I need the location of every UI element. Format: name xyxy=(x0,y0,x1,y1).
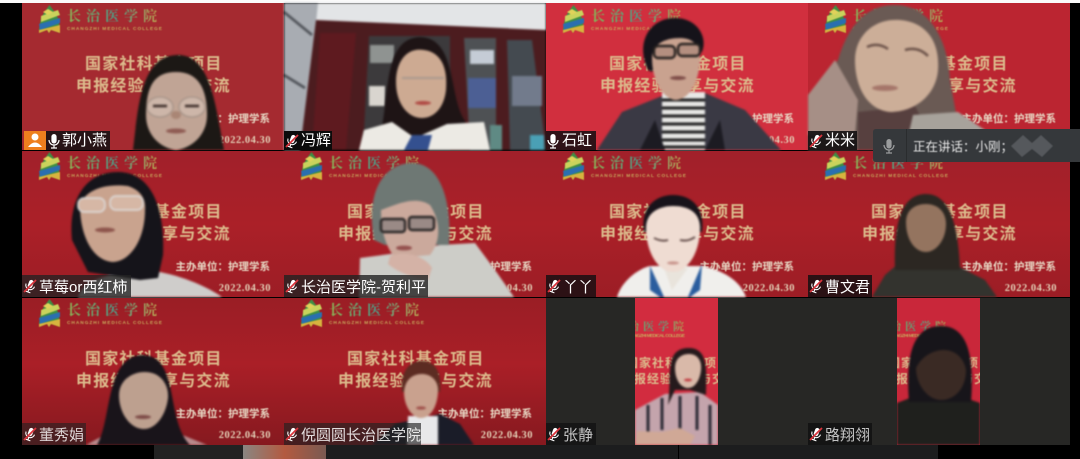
slide: logo and title: 申报经验分享与交流 xyxy=(338,371,493,390)
slide: logo and title: 长治医学院 xyxy=(853,6,948,26)
portrait video: 申报经验分享与交流 xyxy=(883,371,1000,386)
slide: logo and title: 主办单位：护理学系 xyxy=(962,112,1056,125)
slide: logo and title: 国家社科基金项目 xyxy=(609,202,747,221)
video tile: 路翔翎 xyxy=(808,298,1070,445)
slide: logo and title: CHANGZHI MEDICAL COLLEGE xyxy=(591,173,687,179)
name label: 路翔翎 xyxy=(808,423,872,445)
participant: 曹文君 xyxy=(872,194,997,297)
name label: 长治医学院-贺利平: 长治医学院-贺利平 xyxy=(301,278,426,296)
slide: logo and title: CHANGZHI MEDICAL COLLEGE xyxy=(329,173,425,179)
slide: logo and title: 2022.04.30 xyxy=(219,430,271,441)
speaking-now tooltip xyxy=(873,129,1080,162)
office background with bookcase xyxy=(284,3,546,150)
name label: 丫丫: 丫丫 xyxy=(563,279,593,296)
slide: logo and title: 2022.04.30 xyxy=(219,135,271,146)
slide: logo and title: 2022.04.30 xyxy=(481,430,533,441)
slide: logo and title: 国家社科基金项目 xyxy=(347,349,485,368)
slide: logo and title: 长治医学院 xyxy=(329,300,424,320)
slide: logo and title: 申报经验分享与交流 xyxy=(76,371,231,390)
slide: logo and title: 国家社科基金项目 xyxy=(85,202,223,221)
slide: logo and title: 国家社科基金项目 xyxy=(871,202,1009,221)
slide: logo and title: 长治医学院 xyxy=(853,153,948,173)
top white strip xyxy=(0,0,1080,3)
slide: logo and title: 申报经验分享与交流 xyxy=(862,224,1017,243)
slide: logo and title: 申报经验分享与交流 xyxy=(600,76,755,95)
video tile: 米米 xyxy=(808,3,1070,150)
participant: 贺利平 xyxy=(359,163,514,297)
slide: logo and title: 长治医学院 xyxy=(67,300,162,320)
portrait video xyxy=(883,298,1000,445)
portrait video xyxy=(621,298,738,445)
slide: logo and title: 申报经验分享与交流 xyxy=(862,76,1017,95)
name label: 路翔翎: 路翔翎 xyxy=(825,427,870,444)
speaking-now tooltip: 正在讲话：小刚； xyxy=(913,139,1013,154)
icon: mosaic blur over speaker name xyxy=(1011,135,1053,157)
slide: logo and title xyxy=(563,5,795,146)
participant: 石虹 xyxy=(597,18,781,150)
name label: 倪圆圆长治医学院: 倪圆圆长治医学院 xyxy=(301,426,421,444)
slide: logo and title xyxy=(825,5,1056,125)
slide: logo and title: 主办单位：护理学系 xyxy=(438,407,532,420)
name label: 曹文君: 曹文君 xyxy=(825,279,870,296)
slide: logo and title: CHANGZHI MEDICAL COLLEGE xyxy=(591,26,687,32)
name label: 郭小燕 xyxy=(46,131,110,150)
slide: logo and title: CHANGZHI MEDICAL COLLEGE xyxy=(329,320,425,326)
slide: logo and title xyxy=(39,5,271,146)
participant: 董秀娟 xyxy=(86,355,207,445)
participant: 路翔翎 xyxy=(897,326,980,445)
portrait video: 治医学院 xyxy=(628,318,688,334)
participant: 丫丫 xyxy=(617,195,746,297)
portrait video: 国家社科基金项目 xyxy=(888,355,992,370)
name label: 董秀娟: 董秀娟 xyxy=(39,427,84,444)
slide: logo and title: 国家社科基金项目 xyxy=(85,54,223,73)
slide: logo and title: 国家社科基金项目 xyxy=(871,54,1009,73)
slide: logo and title: 长治医学院 xyxy=(591,6,686,26)
video tile: 石虹 xyxy=(546,3,808,150)
slide: logo and title: CHANGZHI MEDICAL COLLEGE xyxy=(853,26,949,32)
video tile: 冯辉 xyxy=(284,3,546,150)
name label: 石虹: 石虹 xyxy=(562,132,592,149)
slide: logo and title: CHANGZHI MEDICAL COLLEGE xyxy=(67,320,163,326)
slide: logo and title: 主办单位：护理学系 xyxy=(700,260,794,273)
participant: 倪圆圆 xyxy=(372,361,474,445)
slide: logo and title: 长治医学院 xyxy=(329,153,424,173)
name label: 丫丫 xyxy=(546,275,596,297)
participant: 冯辉 xyxy=(359,37,490,150)
participant: 草莓or西红柿 xyxy=(71,172,222,297)
video tile: 长治医学院-贺利平 xyxy=(284,151,546,297)
name label: 郭小燕: 郭小燕 xyxy=(62,132,107,149)
slide: logo and title: 主办单位：护理学系 xyxy=(438,260,532,273)
name label: 长治医学院-贺利平 xyxy=(284,275,428,297)
name label: 倪圆圆长治医学院 xyxy=(284,423,421,445)
slide: logo and title: 2022.04.30 xyxy=(1005,283,1057,294)
bottom strip xyxy=(0,445,1080,459)
participant: 张静 xyxy=(635,348,718,445)
slide: logo and title: 长治医学院 xyxy=(67,6,162,26)
video tile: 张静 xyxy=(546,298,808,445)
name label: 冯辉: 冯辉 xyxy=(301,132,331,149)
slide: logo and title: 主办单位：护理学系 xyxy=(962,260,1056,273)
slide: logo and title: 主办单位：护理学系 xyxy=(700,112,794,125)
video tile: 倪圆圆长治医学院 xyxy=(284,298,546,445)
slide: logo and title: 申报经验分享与交流 xyxy=(76,224,231,243)
slide: logo and title: 主办单位：护理学系 xyxy=(176,260,270,273)
name label: 冯辉 xyxy=(284,131,332,150)
slide: logo and title: 主办单位：护理学系 xyxy=(176,112,270,125)
name label: 张静 xyxy=(546,423,596,445)
slide: logo and title: 2022.04.30 xyxy=(481,283,533,294)
name label: 草莓or西红柿 xyxy=(22,275,131,297)
slide: logo and title: 申报经验分享与交流 xyxy=(600,224,755,243)
slide: logo and title xyxy=(301,152,533,294)
slide: logo and title: 申报经验分享与交流 xyxy=(76,76,231,95)
slide: logo and title xyxy=(825,152,1057,294)
slide: logo and title xyxy=(301,299,533,441)
portrait video: 治医学院 xyxy=(890,318,950,334)
participant: 米米 xyxy=(808,5,985,150)
slide: logo and title: 2022.04.30 xyxy=(743,283,795,294)
slide: logo and title: CHANGZHI MEDICAL COLLEGE xyxy=(67,173,163,179)
portrait video: 申报经验分享与交流 xyxy=(621,371,738,386)
name label: 石虹 xyxy=(546,131,596,150)
slide: logo and title: 2022.04.30 xyxy=(743,135,795,146)
slide: logo and title: 申报经验分享与交流 xyxy=(338,224,493,243)
name label: 草莓or西红柿: 草莓or西红柿 xyxy=(39,278,127,296)
slide: logo and title: 2022.04.30 xyxy=(219,283,271,294)
slide: logo and title: CHANGZHI MEDICAL COLLEGE xyxy=(853,173,949,179)
portrait video: 国家社科基金项目 xyxy=(626,355,730,370)
portrait video: CHANGZHI MEDICAL COLLEGE xyxy=(625,333,686,339)
video tile: 曹文君 xyxy=(808,151,1070,297)
slide: logo and title: 长治医学院 xyxy=(591,153,686,173)
video tile: 郭小燕 xyxy=(22,3,284,150)
name label: 米米 xyxy=(808,131,857,150)
name label: 曹文君 xyxy=(808,275,872,297)
slide: logo and title: 主办单位：护理学系 xyxy=(176,407,270,420)
name label: 张静: 张静 xyxy=(563,427,593,444)
name label: 米米: 米米 xyxy=(825,132,855,149)
slide: logo and title: 国家社科基金项目 xyxy=(609,54,747,73)
slide: logo and title xyxy=(563,152,795,294)
host badge xyxy=(24,131,46,150)
slide: logo and title: 国家社科基金项目 xyxy=(347,202,485,221)
slide: logo and title: 国家社科基金项目 xyxy=(85,349,223,368)
video tile: 董秀娟 xyxy=(22,298,284,445)
video tile: 丫丫 xyxy=(546,151,808,297)
portrait video: CHANGZHI MEDICAL COLLEGE xyxy=(887,333,948,339)
slide: logo and title xyxy=(39,299,271,441)
slide: logo and title xyxy=(39,152,271,294)
slide: logo and title: CHANGZHI MEDICAL COLLEGE xyxy=(67,26,163,32)
slide: logo and title: 长治医学院 xyxy=(67,153,162,173)
video tile: 草莓or西红柿 xyxy=(22,151,284,297)
name label: 董秀娟 xyxy=(22,423,86,445)
participant: 郭小燕 xyxy=(133,55,224,150)
